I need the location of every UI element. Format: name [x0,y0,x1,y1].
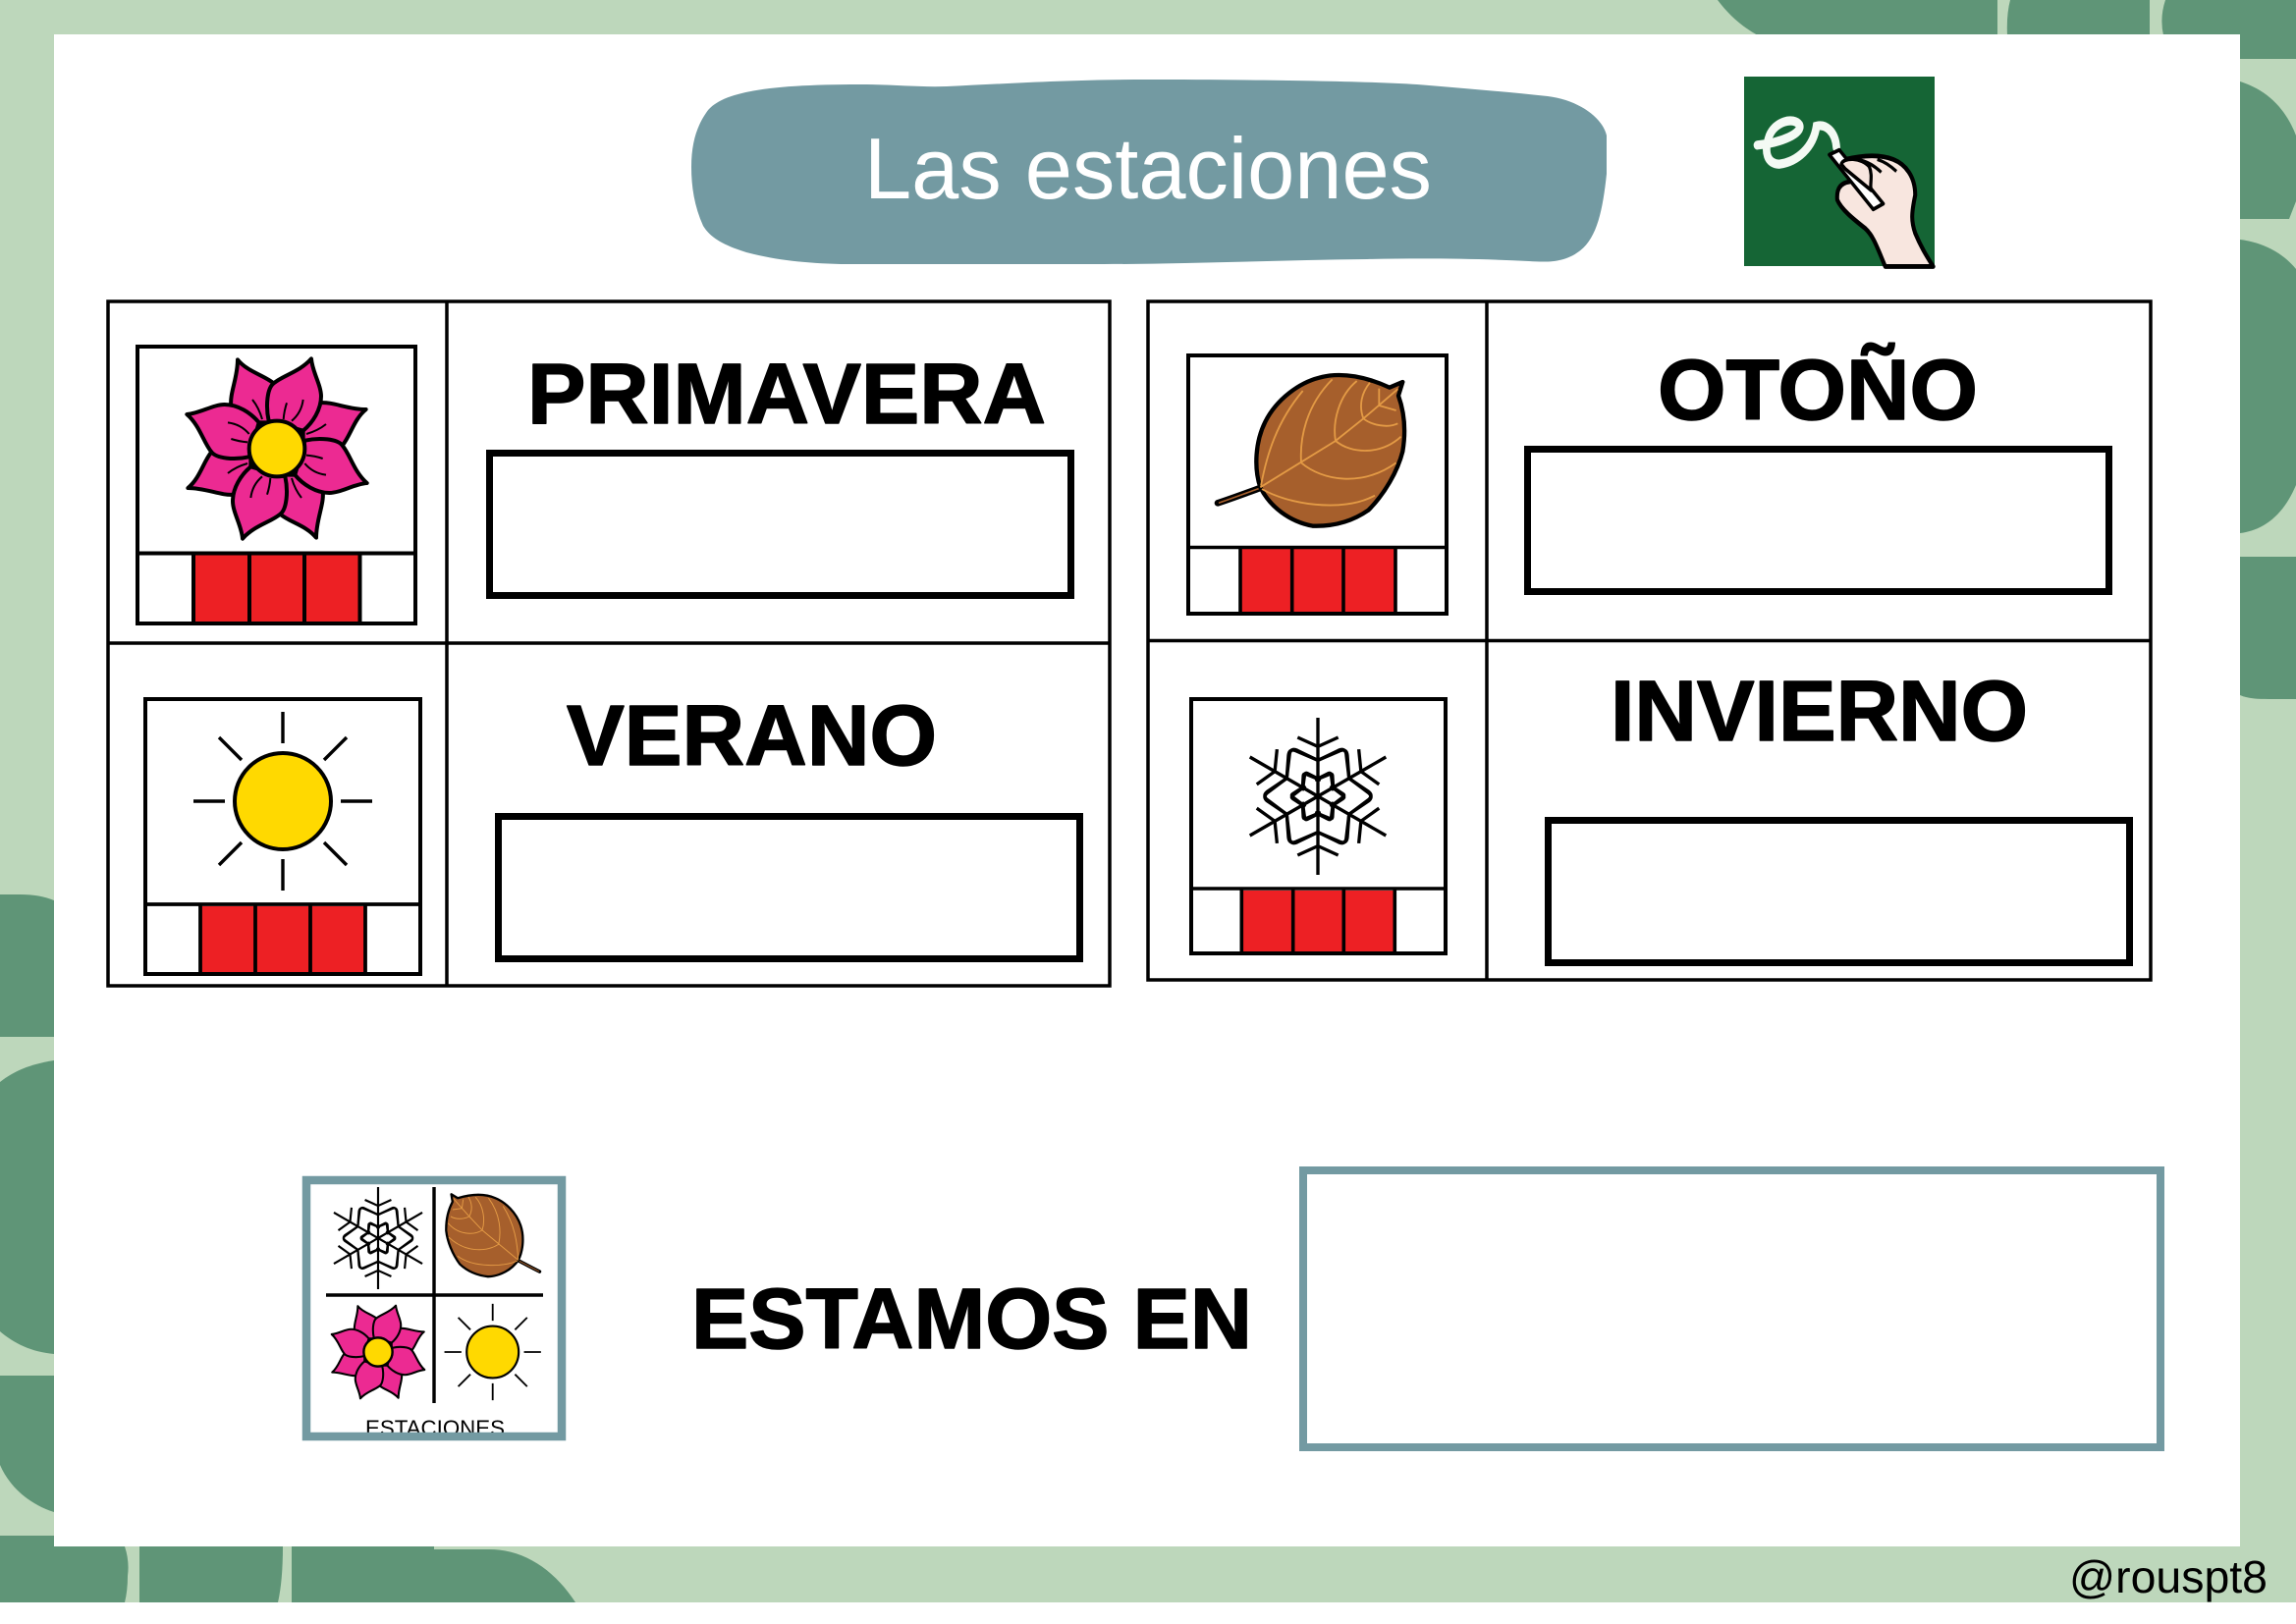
heading: estamos en: ESTAMOS EN [691,1272,1252,1367]
card: snowflake pictogram [1191,699,1446,953]
title banner [691,80,1607,264]
left table: primavera and verano [108,301,1110,986]
attribution: @rouspt8 [2069,1551,2268,1602]
card: sun pictogram [145,699,420,974]
icon: four seasons pictogram: ESTACIONES [365,1416,505,1440]
heading: otono: OTOÑO [1658,343,1978,438]
answer box: estamos en [1303,1170,2160,1447]
icon: hand writing on chalkboard [1744,77,1935,266]
answer box: verano [499,817,1080,958]
title text: Las estaciones [864,120,1432,217]
heading: invierno: INVIERNO [1611,664,2028,759]
answer box: otono [1528,450,2109,591]
heading: primavera: PRIMAVERA [527,347,1046,442]
icon: four seasons pictogram [306,1180,562,1440]
card: flower pictogram [137,347,415,623]
heading: verano: VERANO [567,688,937,784]
answer box: primavera [489,454,1070,595]
answer box: invierno [1548,821,2129,962]
right table: otono and invierno [1148,301,2151,980]
card: leaf pictogram [1188,355,1447,614]
